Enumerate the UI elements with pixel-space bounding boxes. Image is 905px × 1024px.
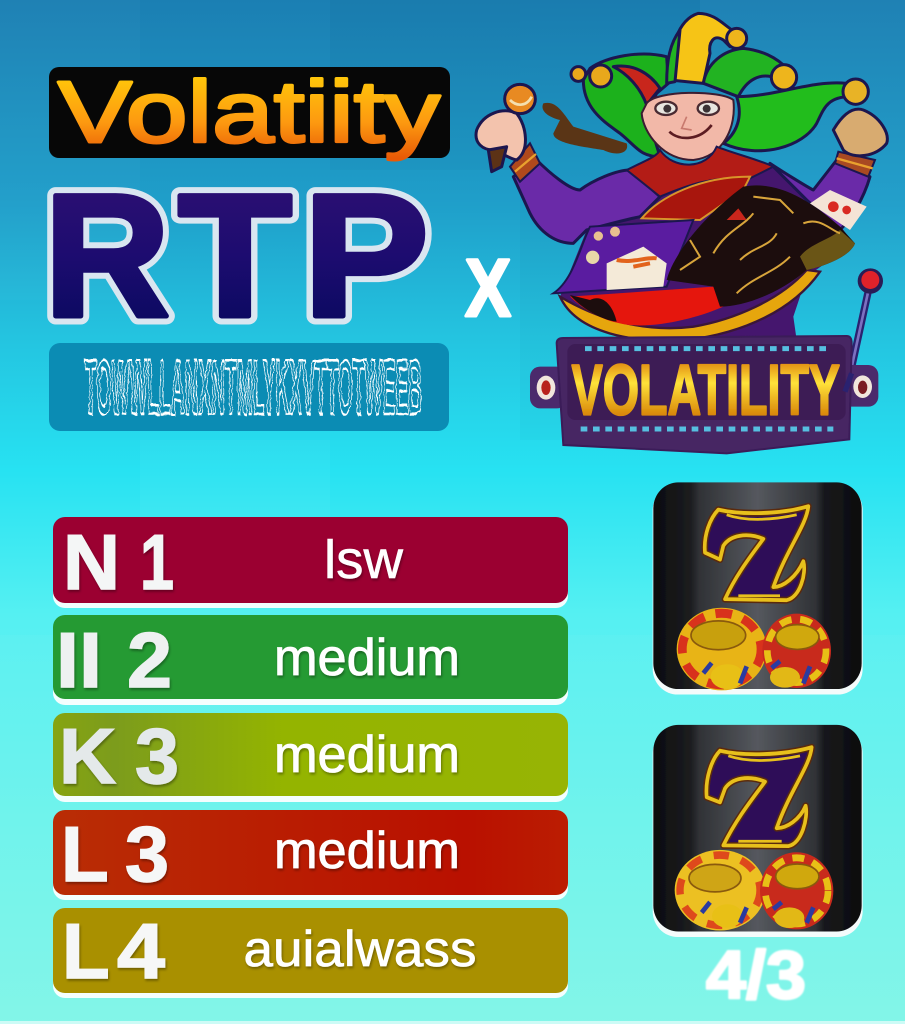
playing cards <box>586 190 867 290</box>
sign inner panel <box>567 344 846 420</box>
row 4: 3 <box>125 810 169 898</box>
heading badge: Volatiity: Volatiity <box>58 64 441 161</box>
row 3: 3 <box>135 712 179 800</box>
row 3: K <box>59 712 116 800</box>
multiplication sign: X <box>465 243 511 334</box>
bowl rim <box>560 270 820 341</box>
row 5: 4 <box>117 907 165 995</box>
subtitle banner with distorted text <box>49 343 449 431</box>
heading: RTP: T <box>178 159 292 354</box>
row 4 <box>53 810 568 900</box>
jester torso and neck filler <box>560 167 853 340</box>
heading: RTP: R <box>44 159 170 354</box>
red bowl interior <box>570 287 723 325</box>
heading: RTP: T <box>178 159 292 354</box>
heading: RTP: R <box>44 159 170 354</box>
lever <box>847 268 883 390</box>
sign lights <box>581 349 833 429</box>
row 3 <box>53 712 568 802</box>
table rows <box>53 517 568 998</box>
heading: RTP <box>44 159 429 354</box>
jester cuffs <box>510 143 875 182</box>
row 1: N <box>63 518 120 606</box>
score: 4/3: 4/3 <box>706 937 806 1013</box>
sign plate <box>557 336 852 453</box>
heading: RTP: P <box>303 159 429 354</box>
row 1: lsw <box>324 530 404 590</box>
jester hat <box>571 13 868 157</box>
sign side tabs <box>530 365 878 408</box>
purple mat <box>553 220 693 293</box>
seven symbol <box>706 747 812 846</box>
row 2 <box>53 615 568 705</box>
row 1: 1 <box>140 518 174 606</box>
row 3: medium <box>274 726 460 784</box>
dark patterned mass <box>570 185 855 322</box>
illustration: jester with volatility sign <box>476 13 887 453</box>
row 5: auialwass <box>244 921 476 977</box>
flying wand <box>542 103 627 153</box>
seven symbol <box>705 506 808 600</box>
jester face <box>642 93 734 160</box>
row 4: medium <box>274 822 460 880</box>
casino chips <box>675 850 833 930</box>
slot tile: bottom seven and chips <box>653 725 863 937</box>
jester collar <box>627 147 773 197</box>
jester hands <box>476 84 887 172</box>
row 2: medium <box>274 629 460 687</box>
sign lever joint <box>845 373 852 392</box>
casino chips <box>677 608 831 690</box>
row 5: L <box>62 907 110 995</box>
row 2: II <box>56 616 102 704</box>
red cap <box>642 177 750 220</box>
row 1 <box>53 517 568 608</box>
jester arms <box>513 160 870 243</box>
row 4: L <box>61 810 109 898</box>
heading: RTP: P <box>303 159 429 354</box>
row 5 <box>53 907 568 998</box>
row 2: 2 <box>127 616 172 704</box>
slot tile: top seven and chips <box>653 482 863 695</box>
